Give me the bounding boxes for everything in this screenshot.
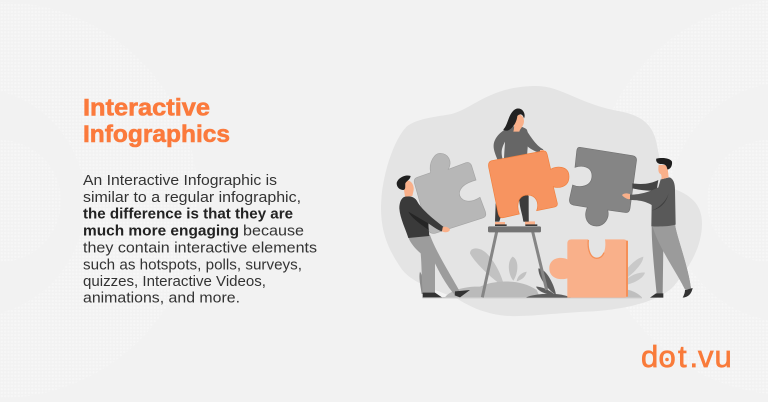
puzzle piece: orange bbox=[488, 151, 569, 218]
body text: because bbox=[243, 222, 304, 240]
background blob bbox=[381, 86, 702, 316]
title: Interactive bbox=[83, 94, 210, 122]
body text: much more engaging bbox=[83, 222, 239, 240]
body text: similar to a regular infographic, bbox=[83, 189, 301, 206]
body text: An Interactive Infographic is bbox=[83, 172, 277, 189]
body text: they contain interactive elements bbox=[83, 240, 317, 256]
logo: dot.vu: dot.vu bbox=[641, 339, 732, 374]
title: Infographics bbox=[83, 121, 230, 148]
stool bbox=[482, 226, 547, 297]
body text bbox=[83, 172, 317, 306]
puzzle piece: dark gray bbox=[569, 147, 637, 226]
body text: the difference is that they are bbox=[83, 206, 293, 222]
man on the left bbox=[397, 176, 470, 297]
illustration: team assembling puzzle bbox=[381, 86, 702, 316]
puzzle piece: light gray bbox=[414, 153, 486, 233]
plants and ground bbox=[422, 248, 645, 298]
woman standing on stool bbox=[494, 109, 544, 226]
title bbox=[83, 94, 230, 148]
man on the right bbox=[622, 158, 693, 298]
woman's leg in notch bbox=[519, 196, 529, 222]
body text: quizzes, Interactive Videos, bbox=[83, 273, 266, 290]
body text: animations, and more. bbox=[83, 290, 240, 306]
puzzle piece: peach bbox=[549, 239, 628, 298]
body text: such as hotspots, polls, surveys, bbox=[83, 256, 302, 274]
